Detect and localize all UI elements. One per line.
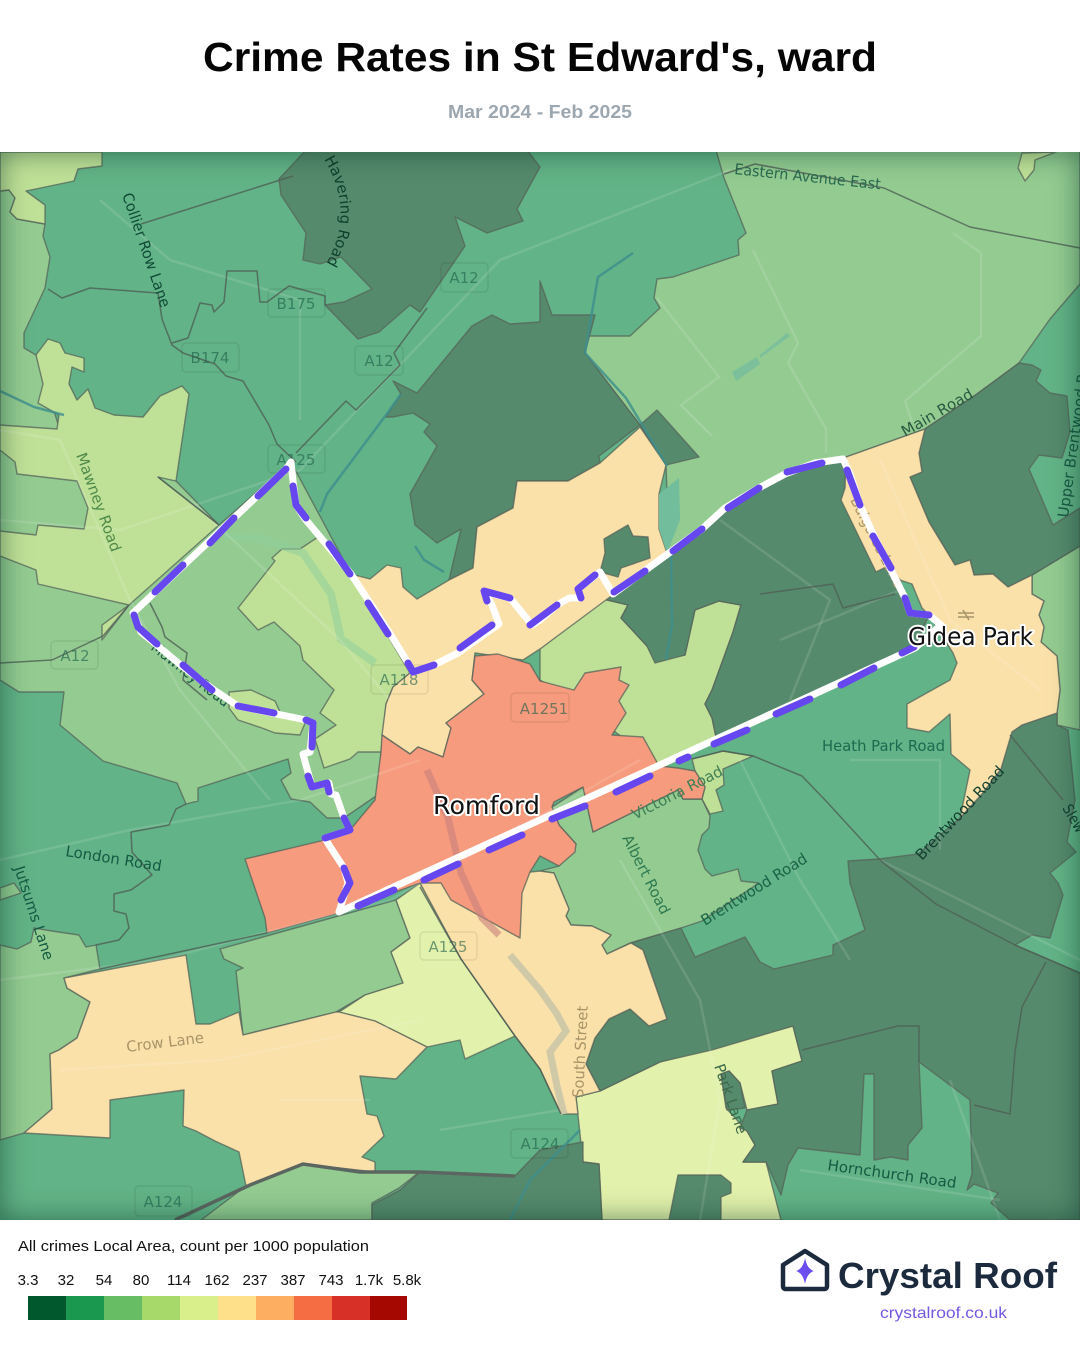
road labels: Park Lane	[710, 1061, 751, 1136]
road labels: Main Road	[898, 385, 976, 440]
region: cream areas	[24, 427, 1060, 1186]
road labels	[10, 155, 1080, 1192]
region: light yellow areas	[339, 883, 802, 1220]
road labels: Collier Row Lane	[118, 190, 174, 310]
subtitle: date range: Mar 2024 - Feb 2025	[448, 102, 632, 122]
road labels: Heath Park Road	[822, 737, 945, 755]
website link: crystalroof.co.uk	[880, 1305, 1008, 1322]
legend scale labels	[18, 1272, 422, 1289]
road labels: Jutsums Lane	[10, 863, 58, 962]
region: salmon high-crime areas	[245, 654, 705, 938]
legend scale labels: 743	[318, 1272, 344, 1289]
road labels: South Street	[569, 1005, 592, 1098]
road shields: A124	[521, 1135, 559, 1153]
region: light green areas	[0, 150, 1080, 1220]
road labels: Brentwood Road	[698, 849, 811, 929]
road shields: A1251	[520, 700, 568, 718]
legend scale labels: 162	[204, 1272, 230, 1289]
road labels: Mawney Road	[148, 638, 233, 711]
legend scale labels: 3.3	[18, 1272, 38, 1289]
legend scale labels: 54	[96, 1272, 112, 1289]
choropleth map of crime rates	[0, 152, 1080, 1220]
legend scale labels: 1.7k	[355, 1272, 384, 1289]
legend scale labels: 5.8k	[393, 1272, 422, 1289]
legend	[18, 1238, 422, 1320]
legend scale labels: 32	[58, 1272, 74, 1289]
legend scale labels: 80	[133, 1272, 149, 1289]
road labels: Albert Road	[618, 832, 674, 917]
road shields: A118	[380, 671, 418, 689]
road labels: Hornchurch Road	[826, 1156, 958, 1192]
road labels: London Road	[64, 842, 163, 875]
road shields: A12	[364, 352, 394, 370]
road shields: A125	[429, 938, 467, 956]
place label: Romford: Romford	[433, 791, 540, 820]
region: dark pocket in cream	[600, 525, 650, 577]
road shields: B175	[277, 295, 315, 313]
road shields: B174	[191, 349, 229, 367]
legend colour bar	[28, 1296, 407, 1320]
legend title: All crimes Local Area, count per 1000 population	[18, 1238, 369, 1255]
road shields: A12	[60, 647, 90, 665]
water and parks	[0, 253, 790, 1220]
logo: Crystal Roof	[780, 1248, 1058, 1322]
legend scale labels: 114	[167, 1272, 191, 1289]
road labels: Brentwood Road	[912, 762, 1008, 864]
region: dark green areas	[279, 150, 1080, 1220]
ward boundary: St Edward's	[133, 459, 941, 912]
legend scale labels: 387	[280, 1272, 306, 1289]
icon: house with star	[780, 1248, 830, 1292]
boundary lines	[0, 164, 1080, 1220]
map edge vignette	[0, 152, 1080, 1220]
road labels: Eastern Avenue East	[734, 160, 882, 193]
road labels: Mawney Road	[72, 450, 125, 554]
road shields: A124	[144, 1193, 182, 1211]
title: Crime Rates in St Edward's, ward	[203, 34, 877, 80]
road shields: A12	[449, 269, 479, 287]
road shields	[51, 263, 569, 1216]
region: pale green areas	[0, 152, 1056, 814]
road labels: Balgores Lane	[846, 494, 908, 591]
logo wordmark: Crystal Roof	[838, 1255, 1058, 1296]
road shields: A125	[277, 451, 315, 469]
road labels: Havering Road	[324, 155, 352, 268]
legend scale labels: 237	[242, 1272, 268, 1289]
road labels: Crow Lane	[125, 1029, 205, 1056]
place label: Gidea Park: Gidea Park	[908, 622, 1033, 651]
icon: railway station	[958, 610, 974, 620]
road labels: Victoria Road	[629, 762, 726, 824]
road network	[0, 170, 1080, 1220]
